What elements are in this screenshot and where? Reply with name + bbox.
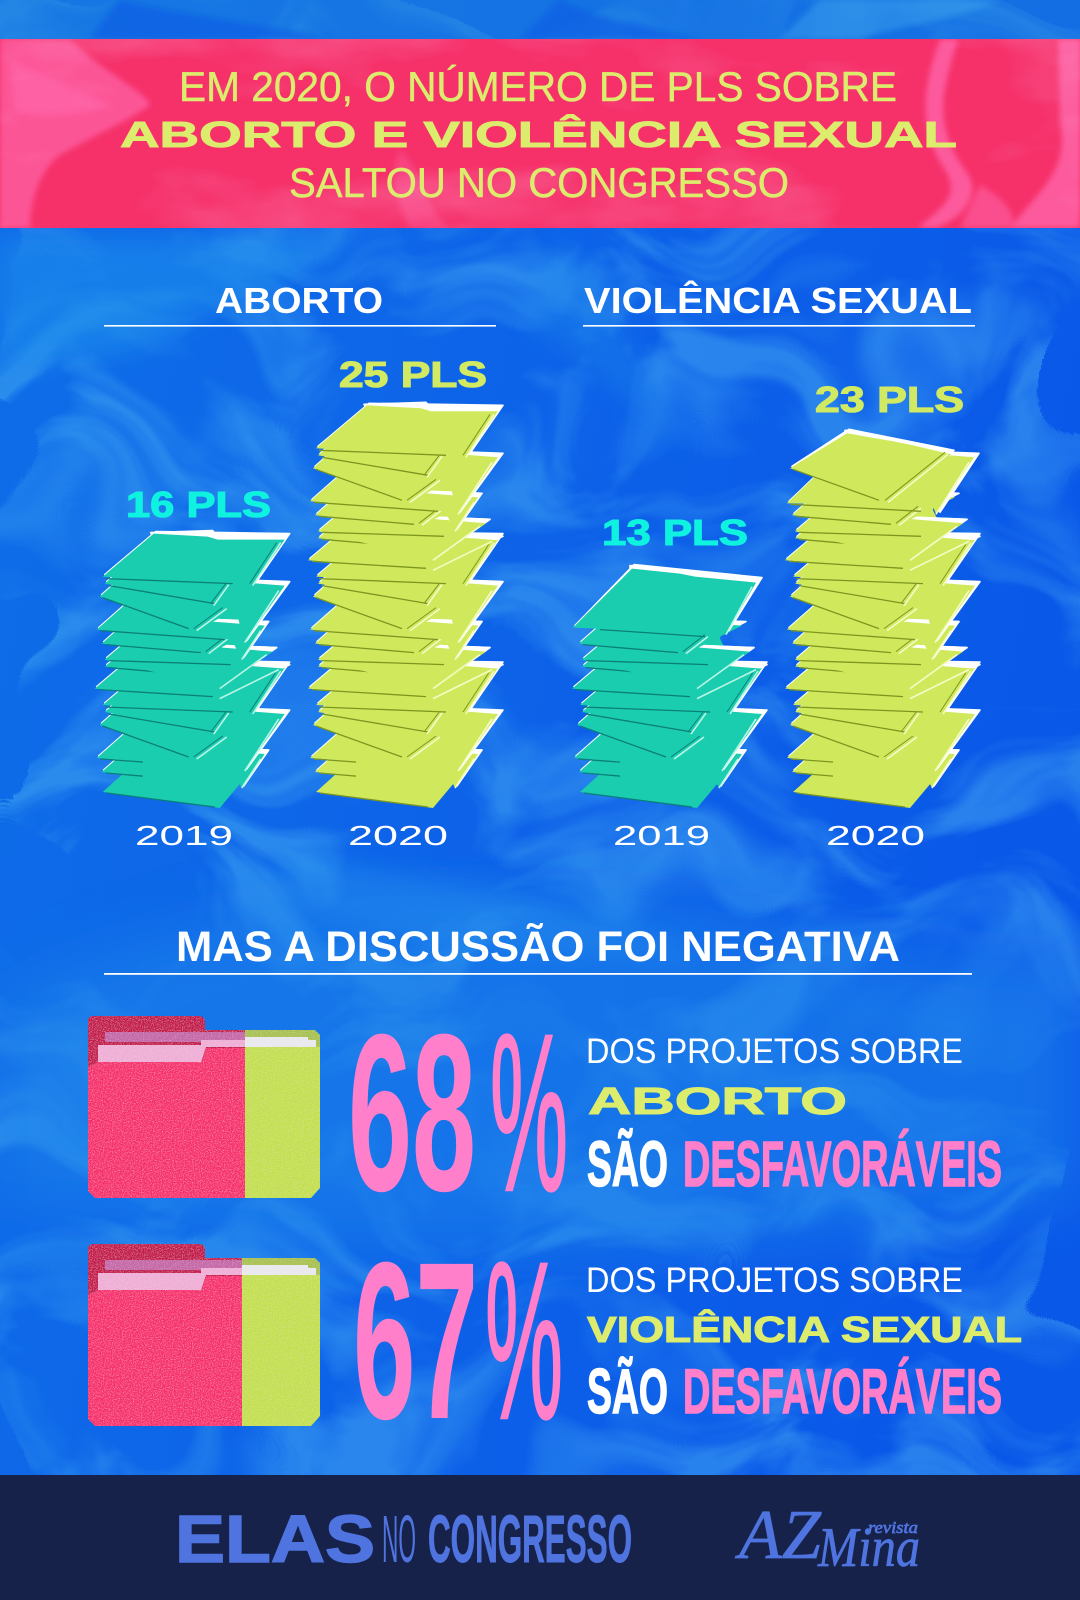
heading: mas a discussao foi negativa: MAS A DISCUSSÃO FOI NEGATIVA	[176, 923, 900, 971]
stat: 68%: 68	[348, 988, 476, 1238]
caption: 67%	[586, 1261, 1022, 1427]
year label: 2020: 2020	[348, 820, 448, 851]
title text: ABORTO E VIOLÊNCIA SEXUAL	[120, 113, 957, 155]
footer: CONGRESSO	[428, 1502, 632, 1577]
caption: 68%	[586, 1032, 1002, 1200]
caption: 67%: VIOLÊNCIA SEXUAL	[587, 1308, 1022, 1350]
logo: azmina: AZ	[735, 1497, 822, 1574]
folder stack: aborto 2019, 16 PLS	[95, 531, 290, 808]
folder stack: violencia 2019, 13 PLS	[572, 565, 767, 808]
logo: azmina: revista	[868, 1518, 918, 1537]
title banner	[0, 39, 1080, 228]
logo: azmina	[735, 1497, 920, 1579]
logo: elas no congresso: NO	[382, 1502, 416, 1577]
title text: EM 2020, O NÚMERO DE PLS SOBRE	[179, 63, 897, 110]
heading: violencia sexual: VIOLÊNCIA SEXUAL	[584, 279, 972, 321]
panel: 68% aborto	[88, 988, 1002, 1238]
year label: 2019: 2019	[135, 820, 233, 851]
title text	[120, 63, 957, 206]
folder stack: violencia 2020, 23 PLS	[785, 429, 980, 808]
caption: 68%: DOS PROJETOS SOBRE	[586, 1032, 963, 1071]
caption: 67%: DOS PROJETOS SOBRE	[586, 1261, 963, 1300]
year label: 2019: 2019	[613, 820, 710, 851]
value label: 13 PLS: 13 PLS	[602, 512, 748, 553]
title text: SALTOU NO CONGRESSO	[289, 159, 789, 206]
panel: 68% aborto: %	[490, 988, 568, 1238]
stat: 67%: 67	[353, 1216, 478, 1466]
value label: 23 PLS: 23 PLS	[815, 379, 964, 420]
value label: 25 PLS: 25 PLS	[339, 354, 487, 395]
caption: 68%: SÃO	[587, 1128, 668, 1200]
panel: 67% violencia sexual: %	[485, 1216, 563, 1466]
logo: elas no congresso	[175, 1502, 632, 1577]
value label: 16 PLS: 16 PLS	[126, 484, 271, 525]
heading: aborto: ABORTO	[215, 280, 383, 321]
panel: violencia sexual chart	[572, 279, 980, 851]
footer	[0, 1475, 1080, 1600]
caption: 67%: SÃO	[587, 1356, 668, 1427]
logo: elas no congresso: ELAS	[175, 1502, 375, 1577]
year label: 2020: 2020	[826, 820, 925, 851]
folder stack: aborto 2020, 25 PLS	[308, 402, 503, 808]
caption: 68%: ABORTO	[588, 1081, 847, 1123]
panel: aborto chart	[95, 280, 503, 851]
panel: 67% violencia sexual	[88, 1216, 1022, 1466]
icon: folder 67%	[88, 1244, 320, 1426]
icon: folder 68%	[88, 1016, 320, 1198]
logo: azmina: Mina	[817, 1517, 920, 1579]
